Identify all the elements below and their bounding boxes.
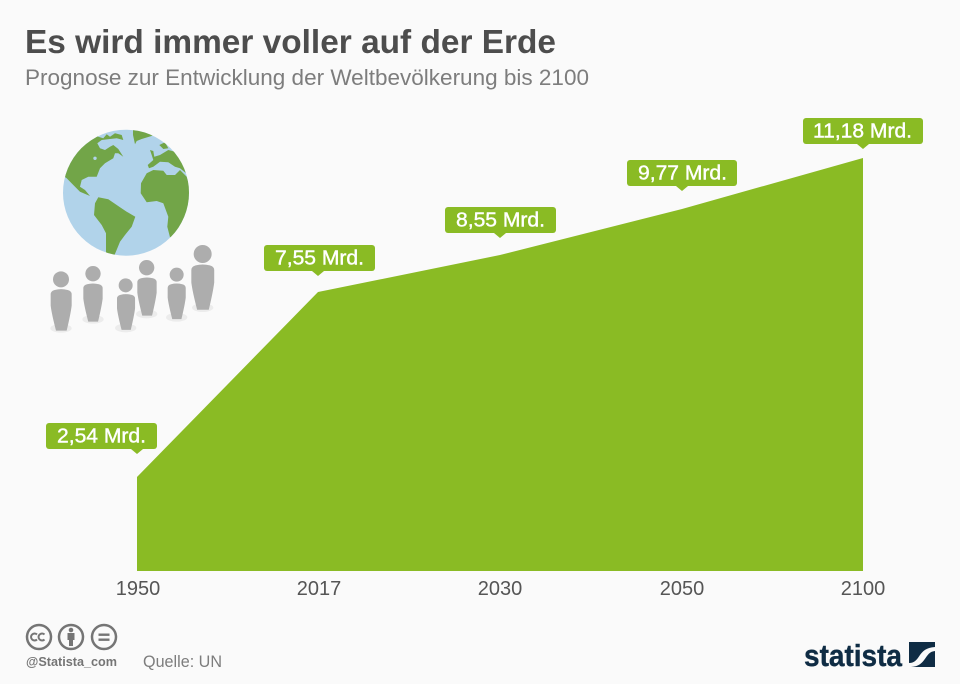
callout: 2050: 9,77 Mrd. [638, 162, 727, 184]
credit handle: @Statista_com [26, 655, 117, 669]
x-axis labels: 2017 [297, 578, 341, 600]
callout: 2100 [803, 118, 923, 149]
callout: 2017: 7,55 Mrd. [275, 246, 364, 270]
area chart [137, 158, 863, 571]
x-axis labels: 2100 [841, 578, 885, 600]
x-axis labels: 2030 [478, 578, 522, 600]
source: Quelle: UN [143, 653, 222, 671]
callout: 1950: 2,54 Mrd. [57, 424, 146, 448]
statista logo: statista [804, 638, 903, 673]
callout: 2030: 8,55 Mrd. [456, 208, 545, 232]
callout: 2100: 11,18 Mrd. [813, 120, 912, 142]
x-axis labels: 1950 [116, 578, 160, 600]
title: Es wird immer voller auf der Erde [25, 24, 556, 61]
icon: globe [63, 130, 189, 256]
x-axis labels: 2050 [660, 578, 704, 600]
icon: creative commons licence [27, 625, 116, 649]
callout: 1950 [46, 423, 157, 454]
callout: 2017 [264, 245, 375, 276]
callout: 2050 [627, 160, 737, 191]
icon: group of people [50, 245, 214, 333]
callout: 2030 [445, 207, 556, 238]
subtitle: Prognose zur Entwicklung der Weltbevölkerung bis 2100 [25, 65, 589, 90]
x-axis labels [116, 578, 885, 600]
